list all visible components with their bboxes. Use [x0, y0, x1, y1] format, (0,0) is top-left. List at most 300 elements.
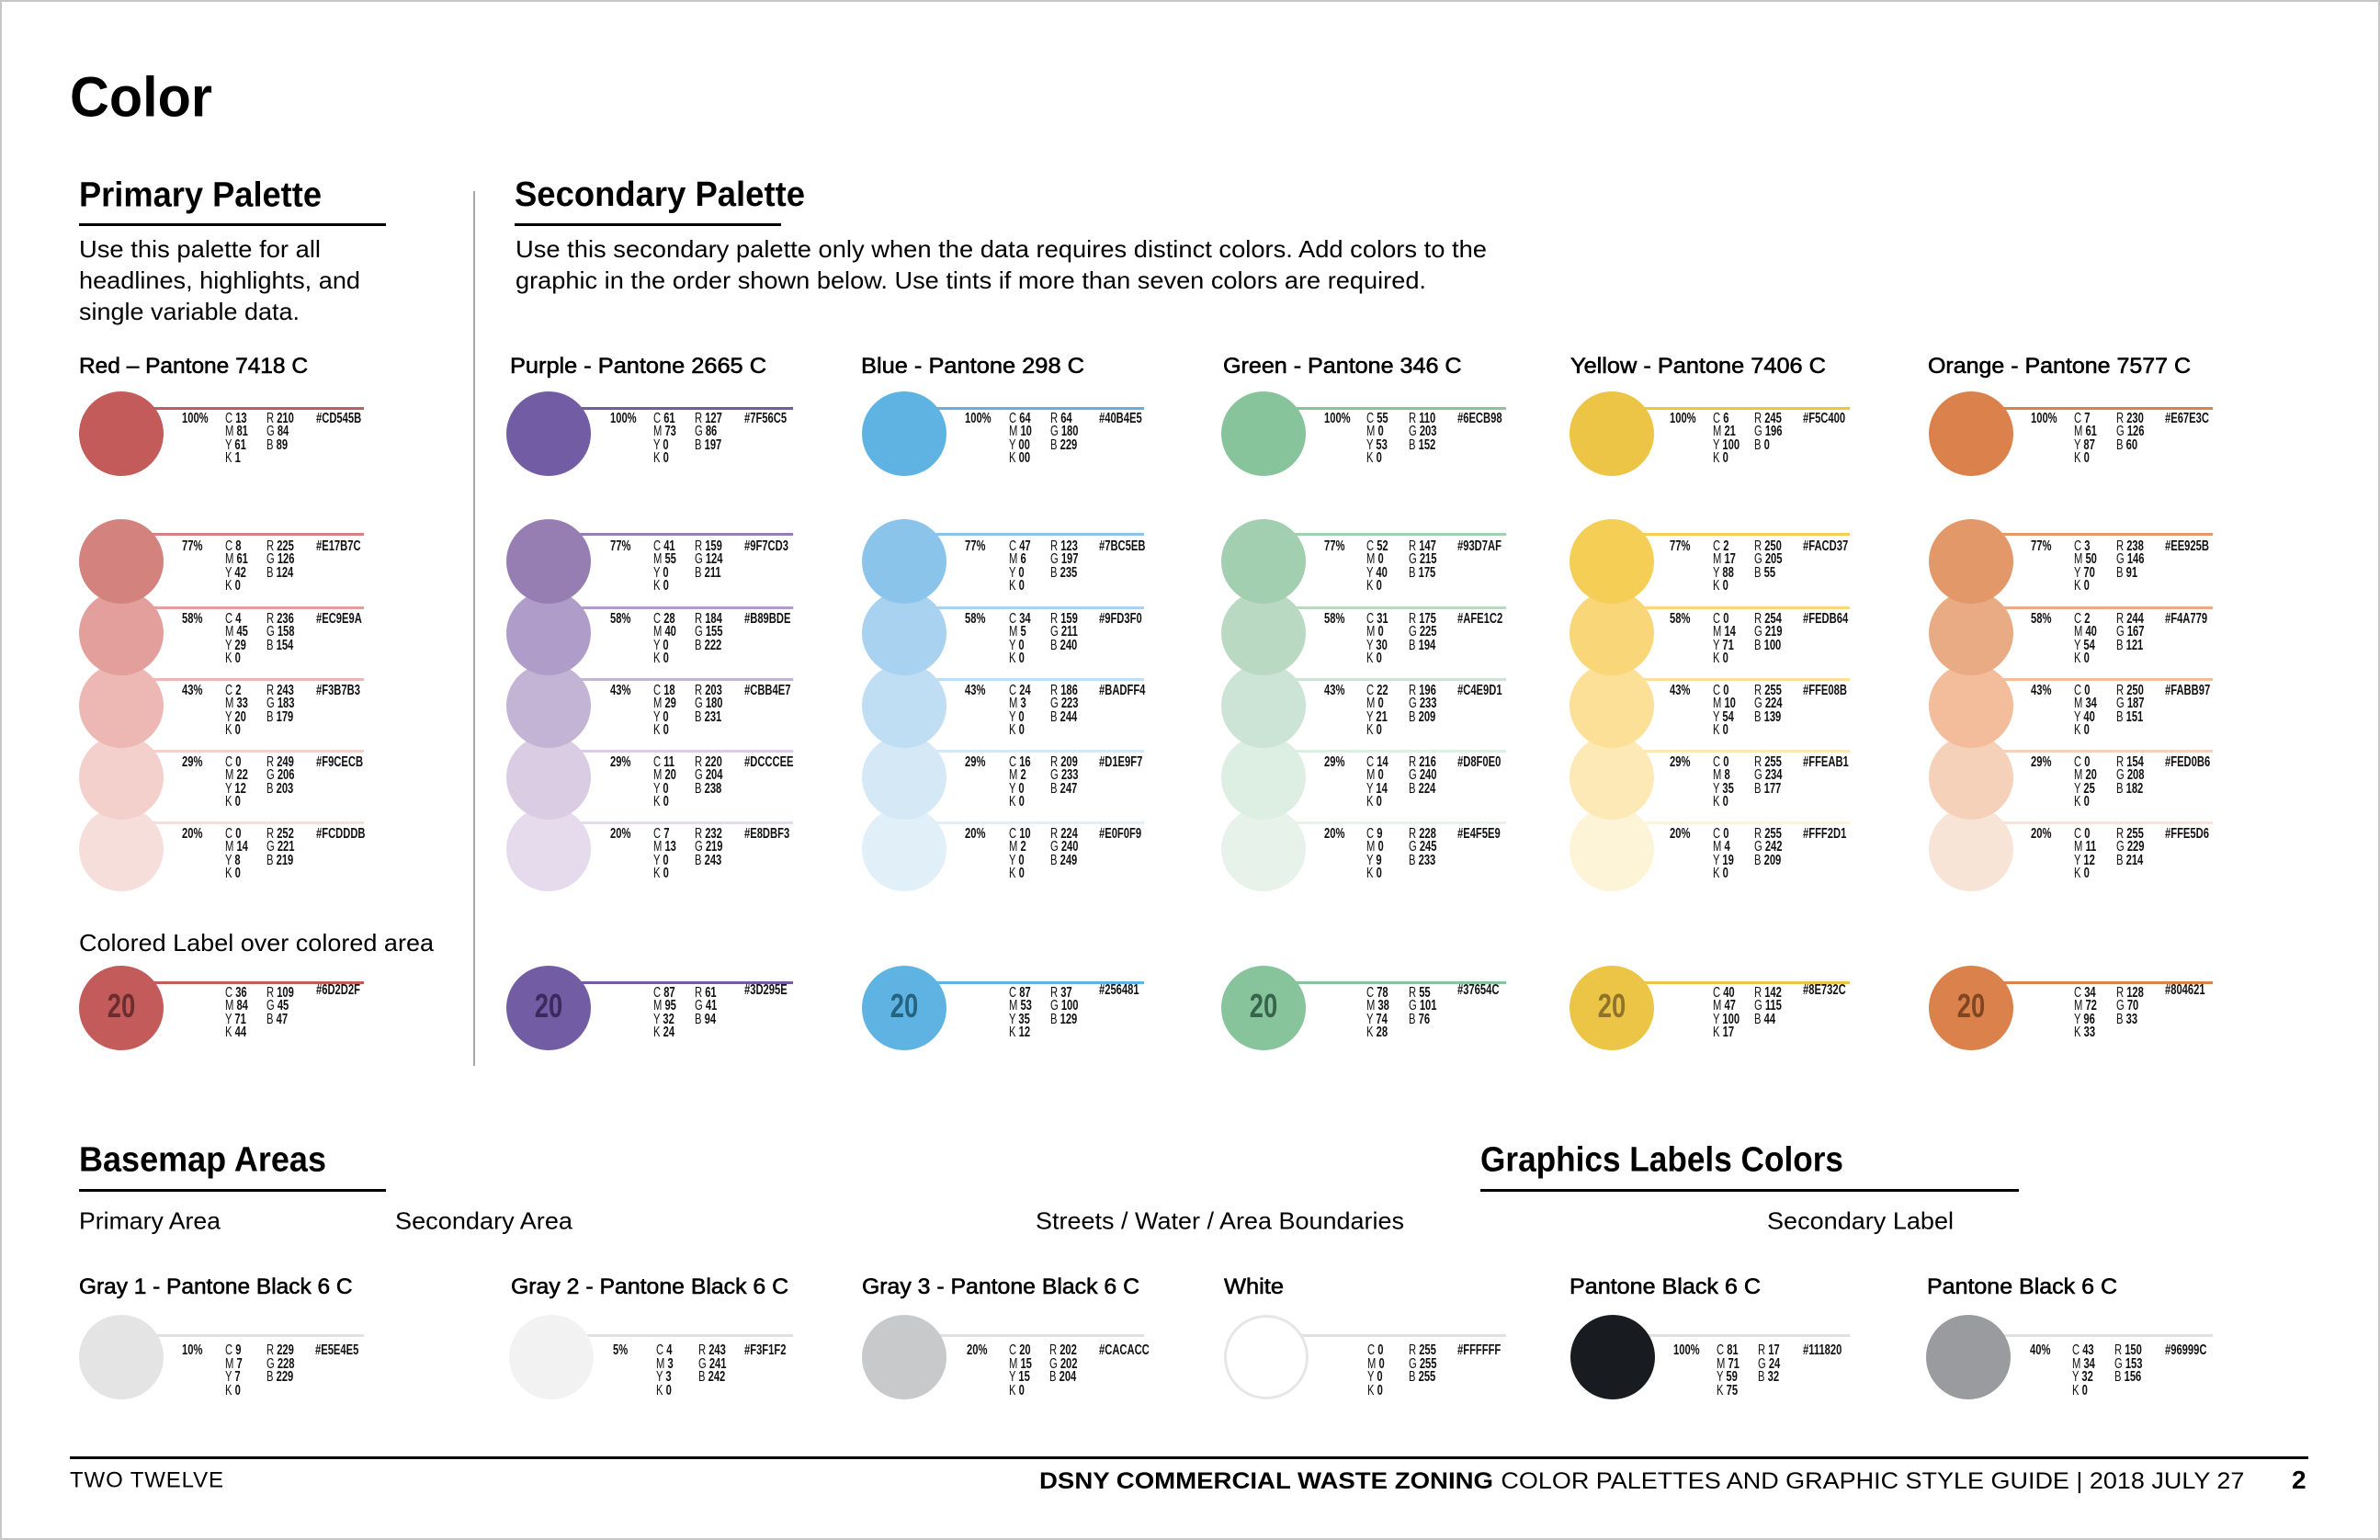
swatch: green 100%: K 0 [1366, 450, 1382, 466]
swatch: orange 58%: M 40 [2074, 624, 2097, 640]
swatch: yellow 77%: C 2 [1713, 538, 1728, 554]
swatch: blue 100%: M 10 [1009, 424, 1031, 439]
swatch: gray 1 10%: G 228 [266, 1356, 295, 1372]
swatch: green 43%: B 209 [1409, 709, 1436, 725]
swatch: yellow 43%: K 0 [1713, 722, 1728, 738]
swatch: gray 2 5%: #F3F1F2 [744, 1342, 786, 1358]
swatch: red 43%: M 33 [225, 696, 248, 711]
label: pantone black tint: Pantone Black 6 C [1927, 1274, 2117, 1299]
swatch: orange colored label: Y 96 [2074, 1012, 2095, 1027]
swatch: red colored label: #6D2D2F [316, 982, 360, 998]
swatch: blue 100%: Y 00 [1009, 437, 1029, 453]
swatch: red 77%: M 61 [225, 551, 248, 567]
swatch: purple 29%: B 238 [695, 781, 721, 797]
swatch: purple 100%: 100% [610, 411, 637, 426]
swatch: red 43% [79, 669, 364, 748]
text block: primary palette description: headlines, highlights, and [79, 266, 360, 294]
swatch: purple 58%: #B89BDE [744, 611, 790, 627]
swatch: green 20%: Y 9 [1366, 853, 1382, 868]
swatch: black 100% [1570, 1315, 1850, 1399]
swatch: black 100%: C 81 [1717, 1342, 1739, 1358]
swatch: green colored label: B 76 [1409, 1012, 1430, 1027]
swatch: blue 20%: G 240 [1050, 839, 1078, 855]
swatch: orange 77%: M 50 [2074, 551, 2097, 567]
swatch: green 58%: R 175 [1409, 611, 1436, 627]
swatch: green 43%: Y 21 [1366, 709, 1388, 725]
swatch: blue 43%: 43% [965, 683, 985, 698]
swatch: orange colored label: #804621 [2165, 982, 2205, 998]
swatch: orange 43%: B 151 [2115, 709, 2143, 725]
swatch: yellow 20%: #FFF2D1 [1803, 826, 1846, 842]
swatch: green 20%: #E4F5E9 [1457, 826, 1501, 842]
swatch: orange 77%: Y 70 [2074, 565, 2095, 581]
swatch: blue colored label [862, 966, 1144, 1050]
swatch: black 100%: K 75 [1717, 1383, 1738, 1398]
swatch: yellow colored label: K 17 [1713, 1025, 1734, 1040]
swatch: blue colored label: B 129 [1050, 1012, 1077, 1027]
swatch: green 20%: 20% [1324, 826, 1344, 842]
swatch: orange 77%: C 3 [2074, 538, 2090, 554]
swatch: gray 3 20%: #CACACC [1099, 1342, 1150, 1358]
swatch: white: R 255 [1409, 1342, 1436, 1358]
swatch: yellow 100%: K 0 [1713, 450, 1728, 466]
label: secondary area: Secondary Area [395, 1207, 572, 1235]
swatch: red 20%: G 221 [266, 839, 295, 855]
swatch: blue 20%: K 0 [1009, 866, 1024, 881]
swatch: red 100%: Y 61 [225, 437, 246, 453]
swatch: orange 20%: 20% [2031, 826, 2051, 842]
swatch: red 100% [79, 391, 364, 476]
text block: secondary palette description [516, 235, 1487, 294]
swatch: red colored label: K 44 [225, 1025, 246, 1040]
swatch: yellow 100%: M 21 [1713, 424, 1736, 439]
swatch: purple 29%: Y 0 [653, 781, 669, 797]
swatch: blue 29%: C 16 [1009, 754, 1030, 770]
swatch: blue 29%: R 209 [1050, 754, 1078, 770]
swatch: red 29%: B 203 [266, 781, 293, 797]
swatch: orange colored label: 20 [1957, 987, 1985, 1024]
swatch: blue 77%: R 123 [1050, 538, 1078, 554]
swatch: green 20%: M 0 [1366, 839, 1384, 855]
swatch: purple 43%: C 18 [653, 683, 675, 698]
label: green pantone: Green - Pantone 346 C [1223, 354, 1462, 379]
swatch: purple 58%: Y 0 [653, 638, 669, 653]
swatch: red 77%: 77% [182, 538, 202, 554]
swatch: blue 43%: Y 0 [1009, 709, 1024, 725]
swatch: blue 58%: R 159 [1050, 611, 1078, 627]
swatch: black 100%: M 71 [1717, 1356, 1740, 1372]
swatch: gray 1 10%: Y 7 [225, 1369, 241, 1385]
swatch: purple 20%: R 232 [695, 826, 722, 842]
swatch: purple 29%: G 204 [695, 767, 722, 783]
swatch column: orange [1929, 349, 2213, 1050]
swatch: green 77%: Y 40 [1366, 565, 1388, 581]
swatch: blue 20%: B 249 [1050, 853, 1077, 868]
swatch: red 77%: B 124 [266, 565, 293, 581]
swatch: blue 43%: #BADFF4 [1099, 683, 1145, 698]
swatch: blue 43%: G 223 [1050, 696, 1078, 711]
swatch: yellow 20% [1570, 807, 1850, 891]
swatch: red 20%: 20% [182, 826, 202, 842]
swatch: gray 3 20%: G 202 [1049, 1356, 1078, 1372]
swatch: orange 29%: 29% [2031, 754, 2051, 770]
swatch: green 43%: G 233 [1409, 696, 1437, 711]
swatch: green 20% [1221, 807, 1506, 891]
swatch: red 100%: B 89 [266, 437, 288, 453]
panel: secondary palette [506, 176, 2213, 1050]
swatch: orange 29%: K 0 [2074, 794, 2090, 810]
swatch: red 20%: M 14 [225, 839, 248, 855]
swatch: yellow 20%: B 209 [1754, 853, 1781, 868]
swatch: yellow colored label: M 47 [1713, 998, 1736, 1013]
swatch: red 43%: G 183 [266, 696, 295, 711]
swatch: red 20%: R 252 [266, 826, 294, 842]
swatch: purple 77%: 77% [610, 538, 631, 554]
swatch: yellow 29%: C 0 [1713, 754, 1728, 770]
swatch: green 77%: B 175 [1409, 565, 1436, 581]
swatch: purple 43%: R 203 [695, 683, 722, 698]
swatch: yellow 20%: Y 19 [1713, 853, 1734, 868]
swatch: green colored label: M 38 [1366, 998, 1389, 1013]
swatch: yellow 43%: #FFE08B [1803, 683, 1847, 698]
swatch: orange 43%: #FABB97 [2165, 683, 2210, 698]
swatch: yellow colored label: G 115 [1754, 998, 1782, 1013]
heading: primary palette: Primary Palette [79, 176, 322, 215]
label: primary area: Primary Area [79, 1207, 221, 1235]
swatch: blue 100%: R 64 [1050, 411, 1071, 426]
swatch: blue 58% [862, 597, 1144, 675]
swatch column: gray 2 [509, 1268, 793, 1399]
swatch: blue 77%: 77% [965, 538, 985, 554]
swatch: red colored label: B 47 [266, 1012, 288, 1027]
swatch: red 29% [79, 742, 364, 820]
swatch: purple 100%: K 0 [653, 450, 669, 466]
swatch: red 58%: M 45 [225, 624, 248, 640]
swatch: orange 77%: R 238 [2115, 538, 2143, 554]
swatch: purple colored label: B 94 [695, 1012, 716, 1027]
title: Color [70, 66, 212, 129]
swatch: green 100%: 100% [1324, 411, 1351, 426]
swatch: green 43% [1221, 663, 1506, 748]
swatch: orange 100%: M 61 [2074, 424, 2097, 439]
swatch: blue 77%: M 6 [1009, 551, 1026, 567]
swatch: green 29%: 29% [1324, 754, 1344, 770]
swatch: orange 43%: Y 40 [2074, 709, 2095, 725]
swatch: blue 29% [862, 742, 1144, 820]
swatch: orange 29%: B 182 [2115, 781, 2143, 797]
swatch: red 100%: M 81 [225, 424, 248, 439]
swatch: gray 2 5%: 5% [613, 1342, 628, 1358]
label: purple pantone: Purple - Pantone 2665 C [510, 354, 766, 379]
swatch: red 20%: B 219 [266, 853, 293, 868]
swatch: green 43%: M 0 [1366, 696, 1384, 711]
swatch: gray 2 5%: M 3 [656, 1356, 674, 1372]
swatch: red 100%: 100% [182, 411, 208, 426]
swatch: green 43%: C 22 [1366, 683, 1388, 698]
label: gray 1: Gray 1 - Pantone Black 6 C [79, 1274, 352, 1299]
swatch: green 29%: B 224 [1409, 781, 1436, 797]
swatch: red 20% [79, 813, 366, 891]
swatch: orange 20%: K 0 [2074, 866, 2090, 881]
swatch: purple 100%: Y 0 [653, 437, 669, 453]
swatch: blue 58%: M 5 [1009, 624, 1026, 640]
swatch: orange 58%: C 2 [2074, 611, 2090, 627]
swatch: blue 29%: G 233 [1050, 767, 1078, 783]
swatch: blue 77%: Y 0 [1009, 565, 1024, 581]
swatch: purple 20%: B 243 [695, 853, 721, 868]
swatch: green 100%: Y 53 [1366, 437, 1388, 453]
swatch: green 58%: C 31 [1366, 611, 1388, 627]
swatch: blue 20%: #E0F0F9 [1099, 826, 1141, 842]
swatch: green 58%: M 0 [1366, 624, 1384, 640]
swatch: yellow 43% [1570, 663, 1850, 748]
swatch: blue 100%: #40B4E5 [1099, 411, 1142, 426]
swatch: red colored label: R 109 [266, 985, 294, 1001]
label: pantone black: Pantone Black 6 C [1570, 1274, 1761, 1299]
caption: colored label over colored area: Colored Label over colored area [79, 929, 435, 957]
swatch: red 77%: G 126 [266, 551, 295, 567]
swatch: blue 100%: C 64 [1009, 411, 1030, 426]
swatch: blue 58%: Y 0 [1009, 638, 1024, 653]
swatch: green colored label: R 55 [1409, 985, 1431, 1001]
swatch: yellow 29%: M 8 [1713, 767, 1730, 783]
swatch: white: B 255 [1409, 1369, 1435, 1385]
swatch: gray 40%: 40% [2030, 1342, 2050, 1358]
swatch: yellow 77%: Y 88 [1713, 565, 1734, 581]
swatch: red 43%: K 0 [225, 722, 241, 738]
swatch: green 100% [1221, 391, 1506, 476]
swatch: orange 43%: M 34 [2074, 696, 2097, 711]
label: gray 3: Gray 3 - Pantone Black 6 C [862, 1274, 1139, 1299]
swatch: yellow 29%: K 0 [1713, 794, 1728, 810]
label: gray 2: Gray 2 - Pantone Black 6 C [511, 1274, 788, 1299]
swatch: blue 58%: C 34 [1009, 611, 1030, 627]
swatch: blue 20%: C 10 [1009, 826, 1030, 842]
swatch column: blue [861, 354, 1145, 1050]
swatch: purple 58%: G 155 [695, 624, 722, 640]
swatch: green 29%: C 14 [1366, 754, 1388, 770]
swatch: purple 100%: R 127 [695, 411, 722, 426]
swatch: purple 20%: K 0 [653, 866, 669, 881]
swatch: green 100%: #6ECB98 [1457, 411, 1502, 426]
swatch: red 58%: K 0 [225, 651, 241, 666]
swatch: yellow 20%: 20% [1670, 826, 1691, 842]
swatch column: red [79, 354, 366, 1050]
footer: document title: DSNY COMMERCIAL WASTE ZONING [1039, 1468, 1493, 1494]
swatch: gray 2 5% [509, 1315, 793, 1399]
swatch: orange 58%: #F4A779 [2165, 611, 2207, 627]
swatch: red 20%: Y 8 [225, 853, 241, 868]
swatch: purple 77%: K 0 [653, 578, 669, 594]
label: red pantone: Red – Pantone 7418 C [79, 354, 308, 379]
swatch: orange 58%: 58% [2031, 611, 2051, 627]
swatch: purple 100%: #7F56C5 [744, 411, 787, 426]
swatch: black 100%: B 32 [1758, 1369, 1779, 1385]
swatch: blue 29%: M 2 [1009, 767, 1026, 783]
swatch: red 100%: G 84 [266, 424, 289, 439]
swatch: purple 43%: Y 0 [653, 709, 669, 725]
swatch: gray 3 20%: C 20 [1009, 1342, 1030, 1358]
swatch: yellow 100%: 100% [1670, 411, 1696, 426]
swatch: green 77%: 77% [1324, 538, 1344, 554]
swatch: orange 58%: R 244 [2115, 611, 2143, 627]
swatch: blue 20%: R 224 [1050, 826, 1078, 842]
swatch: yellow 29%: 29% [1670, 754, 1691, 770]
swatch: gray 40%: C 43 [2072, 1342, 2094, 1358]
swatch: blue 43%: C 24 [1009, 683, 1030, 698]
swatch: green 43%: 43% [1324, 683, 1344, 698]
swatch: gray 1 10%: M 7 [225, 1356, 243, 1372]
swatch: orange 58% [1929, 591, 2213, 675]
swatch: yellow 29%: #FFEAB1 [1803, 754, 1849, 770]
swatch: red 20%: #FCDDDB [316, 826, 366, 842]
swatch: blue 20%: 20% [965, 826, 985, 842]
swatch: orange 20% [1929, 807, 2213, 891]
swatch: purple 29%: M 20 [653, 767, 676, 783]
swatch: gray 1 10%: C 9 [225, 1342, 241, 1358]
swatch: orange 100%: G 126 [2115, 424, 2144, 439]
swatch column: gray 1 [79, 1268, 364, 1399]
label: blue pantone: Blue - Pantone 298 C [861, 354, 1084, 379]
swatch: gray 2 5%: G 241 [698, 1356, 727, 1372]
swatch: orange 29%: #FED0B6 [2165, 754, 2210, 770]
swatch: red 20%: K 0 [225, 866, 241, 881]
swatch: yellow 43%: R 255 [1754, 683, 1782, 698]
swatch: purple 77%: C 41 [653, 538, 675, 554]
swatch: green 77%: G 215 [1409, 551, 1437, 567]
swatch: purple 43%: G 180 [695, 696, 722, 711]
swatch: blue 100%: K 00 [1009, 450, 1030, 466]
label: streets water area boundaries: Streets / Water / Area Boundaries [1036, 1207, 1404, 1235]
swatch: blue 77%: #7BC5EB [1099, 538, 1145, 554]
swatch: purple 43%: M 29 [653, 696, 676, 711]
swatch: purple 58%: C 28 [653, 611, 675, 627]
swatch: yellow 29%: Y 35 [1713, 781, 1734, 797]
swatch: green 100%: M 0 [1366, 424, 1384, 439]
heading: basemap areas: Basemap Areas [79, 1141, 326, 1180]
swatch: orange 29%: G 208 [2115, 767, 2144, 783]
swatch: blue colored label: C 87 [1009, 985, 1030, 1001]
swatch: purple colored label: M 95 [653, 998, 676, 1013]
swatch: gray 40%: Y 32 [2072, 1369, 2093, 1385]
swatch: red colored label: G 45 [266, 998, 289, 1013]
swatch: red 29%: Y 12 [225, 781, 246, 797]
swatch: yellow 20%: M 4 [1713, 839, 1730, 855]
swatch: yellow colored label: C 40 [1713, 985, 1735, 1001]
swatch: yellow 77%: G 205 [1754, 551, 1783, 567]
swatch: orange 20%: #FFE5D6 [2165, 826, 2209, 842]
text block: primary palette description: Use this palette for all [79, 235, 321, 263]
swatch: orange 58%: Y 54 [2074, 638, 2095, 653]
swatch: purple 43%: K 0 [653, 722, 669, 738]
swatch: green 43%: #C4E9D1 [1457, 683, 1502, 698]
swatch: orange 43%: G 187 [2115, 696, 2144, 711]
swatch: purple 77%: Y 0 [653, 565, 669, 581]
swatch: blue 100%: B 229 [1050, 437, 1077, 453]
swatch: gray 1 10%: K 0 [225, 1383, 241, 1398]
panel: primary palette [79, 176, 435, 1050]
swatch: red 77%: R 225 [266, 538, 294, 554]
swatch: white: #FFFFFF [1457, 1342, 1501, 1358]
swatch: purple 29% [506, 742, 794, 820]
swatch: yellow 43%: Y 54 [1713, 709, 1734, 725]
swatch: green 77%: M 0 [1366, 551, 1384, 567]
swatch: green colored label: G 101 [1409, 998, 1437, 1013]
swatch: blue 29%: 29% [965, 754, 985, 770]
swatch: gray 3 20%: Y 15 [1009, 1369, 1029, 1385]
divider [472, 191, 474, 1066]
swatch: purple colored label [506, 966, 793, 1050]
swatch: green 100%: R 110 [1409, 411, 1436, 426]
swatch: green 100%: B 152 [1409, 437, 1436, 453]
swatch: blue 20%: Y 0 [1009, 853, 1024, 868]
swatch: gray 1 10%: B 229 [266, 1369, 293, 1385]
swatch: orange 100%: #E67E3C [2165, 411, 2209, 426]
swatch: green 43%: K 0 [1366, 722, 1382, 738]
swatch: yellow 29%: B 177 [1754, 781, 1781, 797]
swatch: green 58%: 58% [1324, 611, 1344, 627]
swatch: black 100%: 100% [1673, 1342, 1700, 1358]
swatch: red 58%: #EC9E9A [316, 611, 362, 627]
swatch: green 100%: G 203 [1409, 424, 1437, 439]
swatch: orange colored label: K 33 [2074, 1025, 2095, 1040]
heading: graphics labels colors: Graphics Labels Colors [1479, 1141, 1843, 1180]
footer: document title [1039, 1465, 2245, 1496]
swatch: orange colored label: R 128 [2115, 985, 2143, 1001]
swatch: gray 40%: #96999C [2165, 1342, 2206, 1358]
swatch: orange 20%: M 11 [2074, 839, 2096, 855]
swatch: yellow 77%: R 250 [1754, 538, 1782, 554]
panel: basemap areas [78, 1139, 1512, 1401]
swatch: blue 20%: M 2 [1009, 839, 1026, 855]
swatch: purple 100%: G 86 [695, 424, 717, 439]
swatch: blue 43%: R 186 [1050, 683, 1078, 698]
swatch: blue colored label: M 53 [1009, 998, 1031, 1013]
swatch: red 43%: B 179 [266, 709, 293, 725]
swatch: orange 43% [1929, 663, 2213, 748]
swatch: yellow 100%: B 0 [1754, 437, 1770, 453]
swatch: green colored label: K 28 [1366, 1025, 1388, 1040]
swatch: blue 58%: B 240 [1050, 638, 1077, 653]
swatch: red 29%: G 206 [266, 767, 295, 783]
label: yellow pantone: Yellow - Pantone 7406 C [1570, 354, 1825, 379]
swatch: yellow 58%: 58% [1670, 611, 1691, 627]
swatch: blue 29%: B 247 [1050, 781, 1077, 797]
swatch: purple 29%: R 220 [695, 754, 722, 770]
swatch: orange 29% [1929, 735, 2213, 820]
swatch: gray 2 5%: R 243 [698, 1342, 726, 1358]
swatch: orange 77% [1929, 519, 2213, 604]
swatch: green 43%: R 196 [1409, 683, 1436, 698]
swatch: orange 20%: Y 12 [2074, 853, 2095, 868]
swatch: green 29%: K 0 [1366, 794, 1382, 810]
swatch: blue 100% [862, 391, 1144, 476]
swatch: red colored label [79, 966, 364, 1050]
swatch: orange 100%: 100% [2031, 411, 2057, 426]
swatch: yellow 43%: B 139 [1754, 709, 1781, 725]
swatch: purple 20%: Y 0 [653, 853, 669, 868]
swatch: yellow 29%: G 234 [1754, 767, 1783, 783]
swatch: blue 29%: #D1E9F7 [1099, 754, 1142, 770]
swatch: orange 100%: R 230 [2115, 411, 2143, 426]
swatch: purple colored label: G 41 [695, 998, 717, 1013]
swatch: purple 77%: #9F7CD3 [744, 538, 788, 554]
swatch: blue 58%: K 0 [1009, 651, 1024, 666]
swatch: purple 100% [506, 391, 793, 476]
swatch: white: Y 0 [1367, 1369, 1383, 1385]
swatch: orange 20%: R 255 [2115, 826, 2143, 842]
swatch: purple 77%: M 55 [653, 551, 676, 567]
